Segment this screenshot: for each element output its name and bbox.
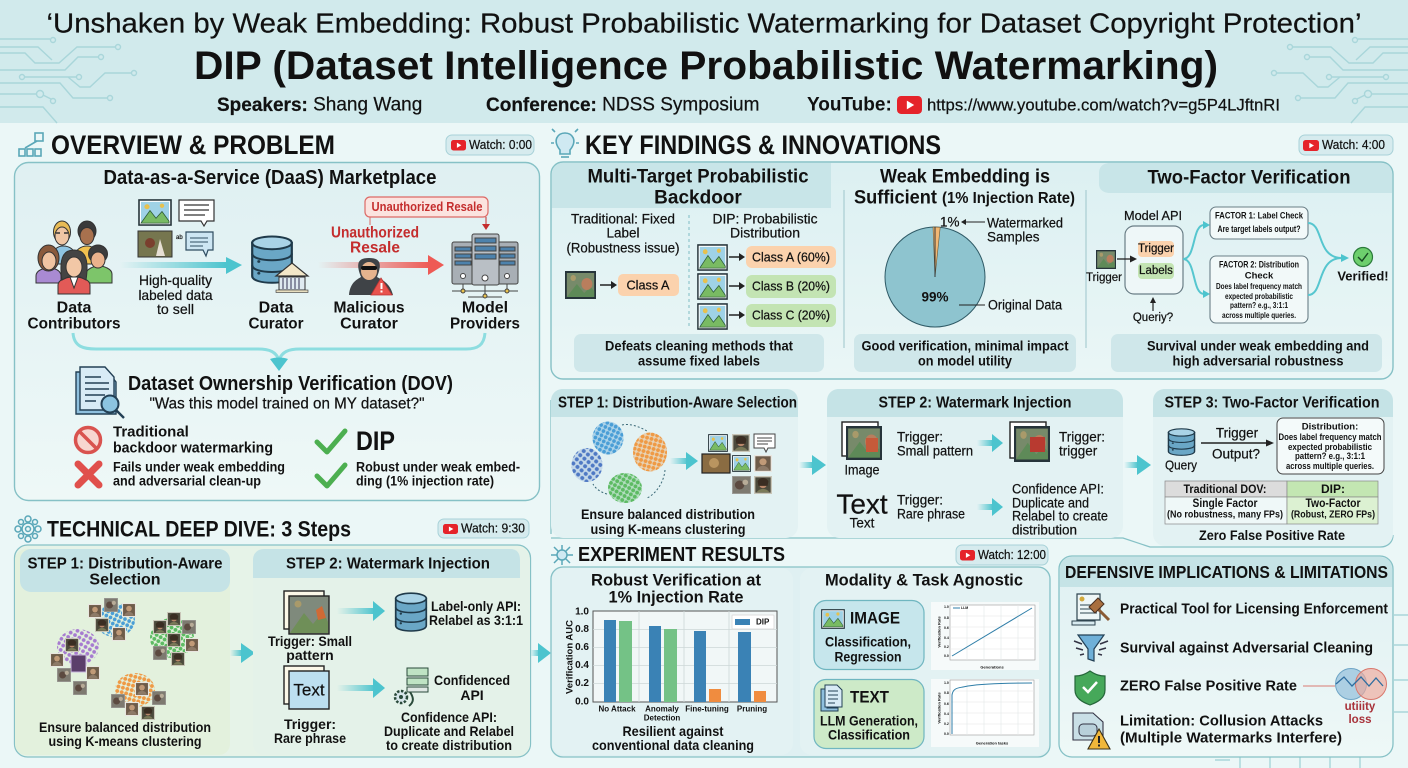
box: factor 2: pattern? e.g., 3:1:1 (1230, 300, 1288, 310)
text: label-only API: Relabel as 3:1:1 (429, 612, 523, 628)
panel: deep dive step 1 (15, 549, 230, 755)
diagram: model API (1124, 209, 1183, 294)
box: factor 2: FACTOR 2: Distribution (1219, 260, 1299, 270)
heading: DOV: Dataset Ownership Verification (DOV) (128, 373, 453, 395)
panel: deep dive step 1: Selection (89, 572, 161, 588)
diagram: class B 20% (698, 274, 836, 299)
title: DIP: DIP (Dataset Intelligence Probabilistic Watermarking) (194, 44, 1218, 88)
text: balanced distribution: using K-means clustering (590, 521, 746, 537)
text: limitation: Limitation: Collusion Attacks (1120, 712, 1323, 730)
section: experiment results (551, 544, 1050, 757)
callout: unauthorized resale (365, 197, 490, 230)
text: trigger trigger: Trigger: (1059, 430, 1105, 444)
text: data curator: Curator (248, 316, 304, 332)
arrow: contributors to curator (120, 257, 242, 274)
callout: good verification: Good verification, minimal impact (862, 338, 1069, 354)
text: confidence API description: Confidence API: (401, 709, 497, 725)
heading: OVERVIEW & PROBLEM (51, 130, 335, 160)
icon: cross (78, 464, 99, 485)
text: DIP probabilistic distribution: DIP: Probabilistic (712, 212, 818, 226)
icon: server and gear (395, 668, 428, 706)
bar chart: Verification AUC (564, 620, 576, 694)
text: labeled data (138, 272, 213, 317)
text: labeled data: to sell (157, 301, 194, 317)
diagram: model API: Trigger (1138, 243, 1174, 255)
card: image: Regression (834, 650, 902, 664)
card: image (814, 600, 924, 670)
icon: label-only database (396, 593, 426, 631)
section: technical deep dive (14, 516, 551, 757)
table: comparison: Two-Factor (1306, 498, 1361, 510)
text: traditional watermarking (113, 424, 273, 456)
line chart: text: 1.0 (944, 681, 949, 685)
line chart: image: 1.0 (944, 605, 949, 609)
icon: image stack (284, 591, 329, 634)
text: fails under weak embedding: Fails under weak embedding (113, 460, 285, 474)
icon: gear network (15, 516, 41, 542)
pie chart (885, 214, 1063, 327)
arrow: phrase (977, 498, 1003, 516)
line chart: text: Verification Rate (936, 692, 942, 724)
text: adversarial cleaning: Survival against Adversarial Cleaning (1120, 640, 1373, 656)
arrows: to factor checks (1183, 221, 1210, 298)
line chart: image: 0.4 (944, 636, 949, 640)
diagram: fixed label (565, 271, 679, 299)
panel: robust verification (552, 568, 793, 755)
card: image: Classification, (825, 634, 911, 650)
diagram: class C 20%: Class C (20%) (752, 308, 830, 322)
heading: multi-target (588, 166, 809, 208)
text: trigger rare phrase: Trigger: (897, 492, 943, 508)
line chart: text (931, 679, 1039, 747)
box: factor 1: Are target labels output? (1218, 224, 1300, 234)
diagram: class A 60%: Class A (60%) (752, 250, 830, 264)
icon: network (551, 545, 573, 565)
arrow: trigger output: Output? (1212, 446, 1260, 462)
text: robust under weak embedding (356, 460, 520, 488)
text: traditional fixed label (566, 212, 680, 256)
panel: technical deep dive (14, 545, 530, 757)
arrow: clusters to thumbnails (670, 452, 698, 470)
text: malicious curator: Malicious (334, 300, 405, 316)
box: factor 2: Does label frequency match (1216, 281, 1302, 291)
text: zero false positive: Zero False Positive Rate (1199, 527, 1345, 543)
text: trigger trigger (1059, 430, 1105, 458)
heading: EXPERIMENT RESULTS (578, 544, 785, 566)
arrow: pattern (977, 434, 1003, 452)
table: comparison: (No robustness, many FPs) (1167, 510, 1283, 520)
text: malicious curator (334, 300, 405, 332)
callout: good verification (854, 334, 1076, 372)
text: confidence API (1012, 482, 1108, 538)
table: comparison (1165, 481, 1378, 524)
panel: robust verification: 1% Injection Rate (608, 588, 744, 606)
text: unauthorized resale (331, 224, 419, 256)
text: traditional watermarking: Traditional (113, 424, 189, 440)
bar chart: 0.6 (575, 642, 589, 653)
icon: venn diagram utility loss (1303, 668, 1386, 726)
icons: data samples (138, 200, 214, 257)
text: data contributors: Data (57, 300, 91, 316)
text: fails under weak embedding (113, 460, 285, 488)
section: key findings and innovations (551, 129, 1393, 379)
line chart: text: 0.4 (944, 712, 949, 716)
diagram: model API: Model API (1124, 209, 1182, 223)
text: licensing enforcement: Practical Tool for Licensing Enforcement (1120, 600, 1388, 618)
callout: survival: high adversarial robustness (1172, 354, 1344, 368)
text: data curator: Data (259, 300, 293, 316)
heading: weak embedding: Sufficient (1% Injection Rate) (854, 188, 1075, 208)
badge: watch 12:00: Watch: 12:00 (978, 548, 1046, 562)
section: overview and problem (14, 130, 540, 500)
callout: defeats cleaning: assume fixed labels (638, 354, 760, 368)
line chart: text: 0.6 (944, 702, 949, 706)
heading: TECHNICAL DEEP DIVE: 3 Steps (47, 516, 351, 542)
text: limitation (1120, 712, 1342, 746)
box: distribution check: Distribution: (1302, 422, 1358, 432)
icon: document with magnifier (76, 367, 124, 418)
diagram: query input (1133, 297, 1173, 324)
bar chart: 0.8 (575, 624, 589, 635)
icon: document warning (1073, 713, 1110, 749)
icon: image stack (842, 422, 882, 460)
panel: overview (14, 162, 540, 500)
panel: deep dive step 2 (253, 549, 530, 755)
table: comparison: Single Factor (1192, 498, 1258, 510)
arrow: text to confidence API (337, 678, 385, 698)
icon: text stack (284, 666, 329, 709)
text: image: Image (844, 462, 880, 478)
text: unauthorized resale: Resale (350, 240, 400, 256)
text: data contributors (28, 300, 121, 332)
panel: deep dive step 2: STEP 2: Watermark Injection (286, 556, 490, 572)
arrow: trigger output (1201, 426, 1274, 462)
icon: hierarchy (19, 133, 43, 156)
scatter with photos (50, 598, 199, 720)
box: factor 2: expected probabilistic (1225, 291, 1293, 301)
text: balanced distribution: Ensure balanced distribution (581, 506, 755, 522)
panel: step 1 (551, 389, 798, 538)
text: robust under weak embedding: ding (1% injection rate) (356, 474, 494, 488)
bar chart: 1.0 (575, 606, 589, 618)
line chart: image: Verification Rate (936, 616, 942, 648)
text: confidence API description: to create distribution (386, 737, 512, 753)
box: distribution check: Does label frequency match (1278, 432, 1382, 442)
panel: robust verification: Resilient against (622, 723, 724, 739)
bar chart: Anomaly (645, 704, 679, 714)
heading: multi-target: Backdoor (654, 188, 742, 208)
pie chart: Samples (987, 230, 1040, 244)
arrow: bracket down to DOV (73, 333, 485, 371)
text: confidence API description (384, 709, 514, 753)
icon: watermarked image stack (1010, 422, 1050, 462)
diagram: trigger input (1086, 250, 1137, 284)
arrow: deep dive step 1 to step 2 (230, 643, 255, 663)
table: comparison: DIP: (1321, 482, 1345, 496)
text: DIP probabilistic distribution (712, 212, 818, 240)
text: confidence API: Confidence API: (1012, 482, 1104, 496)
panel: modality and task agnostic: Modality & Task Agnostic (825, 570, 1023, 590)
text: Text big: Text (850, 516, 875, 530)
badge: watch 9:30: Watch: 9:30 (461, 522, 525, 536)
text: trigger small pattern: Trigger: (897, 430, 943, 444)
box: distribution check: pattern? e.g., 3:1:1 (1295, 451, 1365, 461)
heading: weak embedding (854, 166, 1075, 208)
text: DIP probabilistic distribution: Distribution (730, 226, 800, 240)
text: trigger small pattern: Small pattern (897, 444, 973, 458)
arrow: image to label-only API (337, 601, 385, 621)
callout: survival (1111, 334, 1382, 372)
panel: deep dive step 2: Rare phrase (274, 730, 346, 746)
header band: two-factor (1099, 163, 1392, 193)
bar chart: Pruning (737, 704, 767, 714)
panel: deep dive step 1: STEP 1: Distribution-Aware (28, 556, 223, 572)
badge: watch 4:00 (1299, 135, 1393, 155)
box: factor 1: FACTOR 1: Label Check (1215, 210, 1304, 222)
text: traditional fixed label: Traditional: Fixed (571, 212, 675, 226)
pie chart: Watermarked (987, 216, 1063, 230)
bar chart (564, 606, 777, 722)
panel: step 3: STEP 3: Two-Factor Verification (1164, 394, 1380, 412)
text: trigger rare phrase (897, 492, 965, 522)
panel: robust verification: conventional data cleaning (592, 737, 754, 753)
icon: funnel (1074, 635, 1108, 661)
text: confidenced API: API (460, 687, 484, 703)
thumbnails (702, 434, 775, 494)
icon: text stack: Text (293, 680, 325, 700)
icon: light bulb (551, 129, 579, 157)
pie chart: Original Data (988, 298, 1062, 312)
text: confidence API: Relabel to create (1012, 508, 1108, 524)
line chart: text: 0.2 (944, 722, 949, 726)
callout: unauthorized resale: Unauthorized Resale (372, 200, 483, 214)
arrow: curator to model providers (318, 255, 444, 275)
text: label-only API: Label-only API: (431, 598, 521, 614)
text: model providers (450, 300, 520, 332)
text: labeled data: High-quality (139, 272, 212, 288)
line chart: image (931, 602, 1039, 670)
diagram: class A 60% (698, 245, 836, 270)
header band (0, 0, 1408, 123)
icon: prohibited (76, 428, 100, 452)
text: confidence API: distribution (1012, 522, 1077, 538)
card: image: IMAGE (850, 608, 900, 628)
text: DOV question: "Was this model trained on MY dataset?" (150, 396, 424, 412)
text: data curator (248, 300, 304, 332)
bar chart: Fine-tuning (685, 704, 729, 714)
heading: weak embedding: Weak Embedding is (880, 166, 1050, 188)
heading: multi-target: Multi-Target Probabilistic (588, 166, 809, 188)
arrow: deep dive to experiment (530, 643, 551, 663)
badge: watch 0:00: Watch: 0:00 (469, 138, 532, 152)
pie chart: 1% (940, 214, 960, 230)
badge: watch 9:30 (438, 519, 529, 538)
arrow: step 2 to step 3 (1124, 455, 1151, 475)
section: steps row (551, 389, 1393, 547)
diagram: model API: Labels (1139, 265, 1173, 277)
callout: survival: Survival under weak embedding and (1147, 338, 1369, 354)
icon: model provider servers (452, 234, 518, 298)
icon: youtube (897, 96, 922, 114)
panel: deep dive step 2: Trigger: (284, 716, 336, 732)
bar chart: 0.2 (575, 678, 589, 689)
text: confidenced API (434, 672, 510, 703)
icon: check (317, 431, 345, 452)
icon: data curator database (252, 236, 308, 292)
icon: query database (1168, 429, 1195, 455)
table: comparison: Traditional DOV: (1184, 482, 1266, 496)
line chart: text: Generation tasks (976, 740, 1009, 746)
meta line: Speakers: Shang Wang (217, 94, 422, 116)
meta line: Conference: NDSS Symposium (486, 94, 759, 116)
line chart: image: 0.2 (944, 645, 949, 649)
icon: venn diagram utility loss: loss (1348, 714, 1372, 726)
panel (1059, 556, 1393, 757)
text: trigger rare phrase: Rare phrase (897, 506, 965, 522)
box: distribution check: across multiple queries. (1286, 461, 1374, 471)
text: labeled data: labeled data (138, 287, 213, 303)
bar chart: No Attack (598, 704, 636, 714)
box: distribution check: expected probabilistic (1288, 442, 1372, 452)
bar chart: DIP (756, 618, 770, 626)
panel: step 1: STEP 1: Distribution-Aware Selection (558, 394, 797, 412)
diagram: class B 20%: Class B (20%) (752, 278, 830, 294)
panel outline (551, 400, 1393, 547)
icon: shield (1075, 671, 1105, 705)
panel: step 2 (827, 389, 1123, 538)
bar chart: Detection (644, 714, 680, 722)
box: distribution check (1277, 418, 1384, 474)
header band (1060, 557, 1392, 587)
title: paper name: ‘Unshaken by Weak Embedding: Robust Probabilistic Watermarking for Dataset Copyright Protection’ (46, 8, 1362, 38)
icon: verified: Verified! (1337, 268, 1389, 284)
icon: venn diagram utility loss: utiiity (1345, 701, 1376, 713)
panel: step 2: STEP 2: Watermark Injection (878, 394, 1072, 412)
card: text: LLM Generation, (820, 714, 918, 728)
panel heading: DaaS: Data-as-a-Service (DaaS) Marketplace (104, 167, 436, 189)
text: confidence API: Duplicate and (1012, 496, 1089, 510)
arrows: to verified (1308, 223, 1349, 295)
panel: deep dive step 1: Ensure balanced distribution (39, 719, 211, 735)
heading: two-factor: Two-Factor Verification (1148, 168, 1350, 188)
card: text: TEXT (850, 688, 890, 706)
callout: defeats cleaning: Defeats cleaning methods that (605, 338, 793, 354)
panel: deep dive step 2: Trigger: Small (268, 633, 352, 649)
text: trigger small pattern (897, 430, 973, 458)
icon: data contributors (36, 221, 112, 294)
text: fails under weak embedding: and adversarial clean-up (113, 474, 261, 488)
text: robust under weak embedding: Robust under weak embed- (356, 460, 520, 474)
text: data contributors: Contributors (28, 316, 121, 332)
badge: watch 12:00 (956, 545, 1048, 565)
panel: robust verification: Robust Verification at (591, 570, 761, 590)
icons: data samples: ab (176, 235, 183, 241)
line chart: image: LLM (961, 606, 968, 610)
text: Text big: Text (836, 488, 888, 520)
text: label-only API (429, 598, 523, 628)
box: factor 2: across multiple queries. (1222, 310, 1296, 320)
text: confidence API description: Duplicate and Relabel (384, 723, 514, 739)
line chart: text: 0.8 (944, 691, 949, 695)
bar chart: 0.4 (575, 660, 589, 671)
panel: key findings (551, 162, 1393, 379)
text: DIP: DIP (356, 426, 395, 456)
bar chart: 0.0 (575, 696, 589, 708)
box: factor 2: Check (1245, 270, 1274, 282)
meta line: YouTube: (807, 94, 892, 116)
icon: verified (1337, 248, 1389, 284)
text: model providers: Providers (450, 316, 520, 332)
text: limitation: (Multiple Watermarks Interfere) (1120, 730, 1342, 746)
badge: watch 4:00: Watch: 4:00 (1322, 138, 1385, 152)
arrow: step 1 to step 2 (799, 455, 826, 475)
box: factor 1 (1210, 207, 1308, 239)
meta line (217, 94, 1280, 116)
scatter clusters (572, 422, 667, 503)
diagram: fixed label: Class A (626, 278, 670, 292)
panel: deep dive step 1: using K-means clustering (48, 733, 202, 749)
card: text: Classification (828, 728, 910, 742)
text: traditional fixed label: (Robustness issue) (566, 240, 680, 256)
line chart: image: 0.0 (944, 654, 949, 658)
diagram: trigger input: Trigger (1086, 272, 1122, 284)
text: balanced distribution (581, 506, 755, 537)
section: defensive implications and limitations (1059, 556, 1393, 757)
panel: modality and task agnostic (800, 568, 1049, 755)
line chart: text: 0.0 (944, 732, 949, 736)
text: traditional watermarking: backdoor watermarking (113, 440, 273, 456)
arrow: trigger output: Trigger (1216, 426, 1259, 440)
icon: legal document and gavel (1072, 594, 1109, 625)
callout: defeats cleaning (574, 334, 824, 372)
callout: good verification: on model utility (918, 354, 1012, 368)
icon: malicious curator hacker (349, 258, 393, 295)
text: malicious curator: Curator (340, 316, 398, 332)
text: confidenced API: Confidenced (434, 672, 510, 688)
diagram: query input: Queriy? (1133, 312, 1173, 324)
badge: watch 0:00 (446, 135, 534, 155)
text: model providers: Model (462, 300, 508, 316)
meta line: https://www.youtube.com/watch?v=g5P4LJftnRI (927, 96, 1280, 114)
text: traditional fixed label: Label (606, 226, 640, 240)
text: query: Query (1165, 458, 1197, 472)
diagram: class C 20% (698, 304, 836, 329)
card: text (814, 680, 924, 748)
header band: multi-target (552, 163, 831, 208)
text: unauthorized resale: Unauthorized (331, 224, 419, 242)
line chart: image: Generations (980, 664, 1004, 670)
pie chart: 99% (921, 290, 949, 304)
panel: deep dive step 2: pattern (286, 647, 334, 663)
line chart: image: 0.6 (944, 626, 949, 630)
text: zero false positive: ZERO False Positive Rate (1120, 678, 1297, 694)
box: factor 2 (1210, 256, 1308, 323)
text: trigger trigger: trigger (1059, 444, 1098, 458)
icon: check (317, 465, 345, 486)
heading: KEY FINDINGS & INNOVATIONS (585, 130, 941, 160)
table: comparison: (Robust, ZERO FPs) (1291, 510, 1375, 520)
panel: step 3 (1153, 389, 1393, 546)
line chart: image: 0.8 (944, 616, 949, 620)
panel: experiment results outer (551, 567, 1050, 757)
